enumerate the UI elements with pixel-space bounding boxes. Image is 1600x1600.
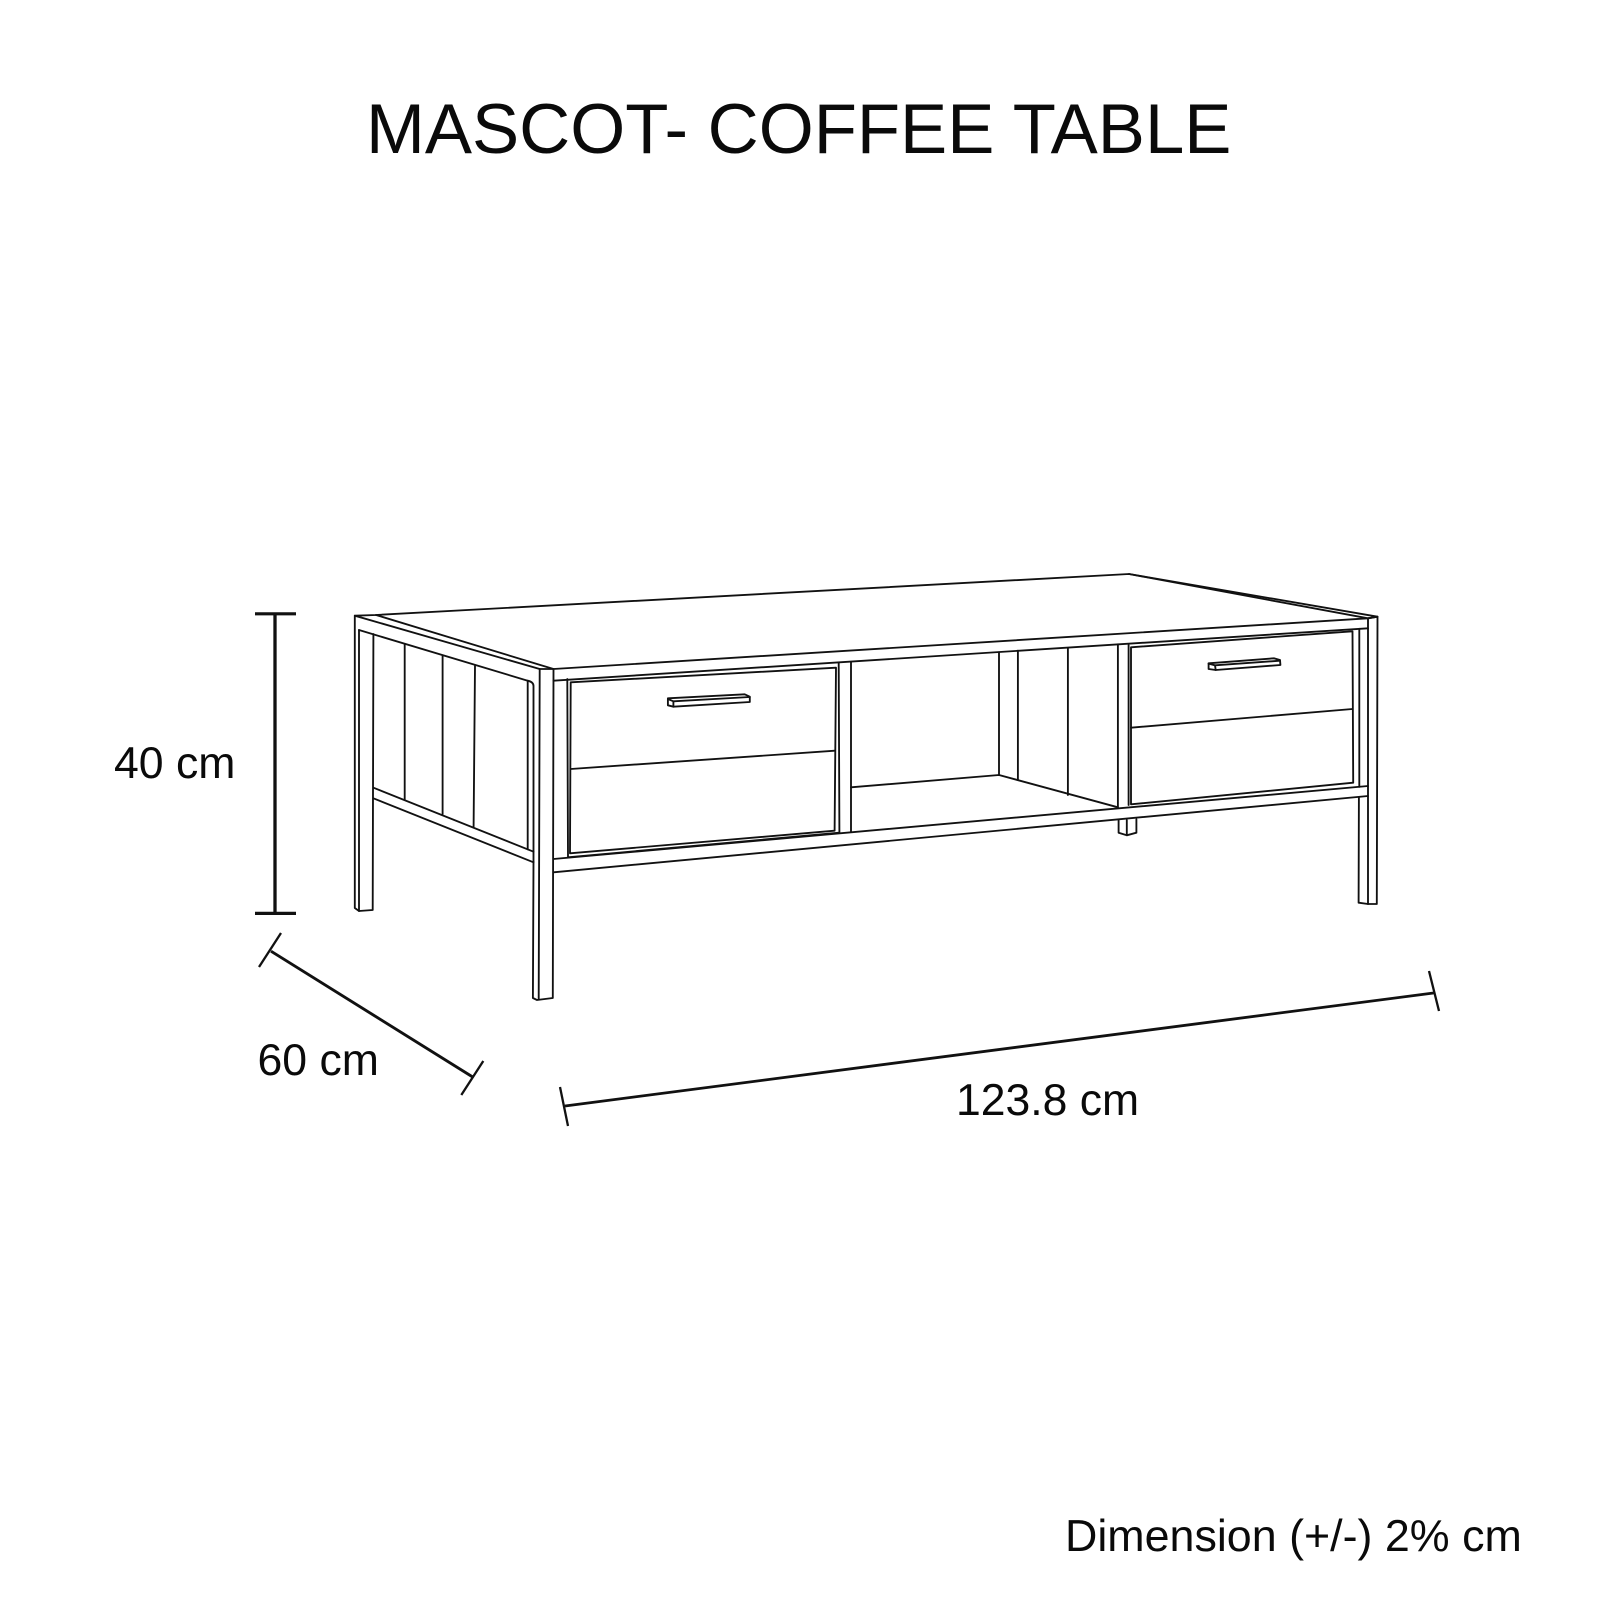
side panel: [359, 630, 534, 862]
coffee table line drawing: [355, 574, 1378, 1000]
front left leg: [533, 669, 554, 1000]
front lower rail: [554, 786, 1368, 872]
front right leg: [1359, 617, 1378, 904]
right drawer handle: [1209, 658, 1280, 670]
height label: 40 cm: [114, 739, 235, 788]
left drawer handle: [668, 694, 750, 707]
title: MASCOT- COFFEE TABLE: [366, 89, 1231, 168]
depth label: 60 cm: [258, 1036, 379, 1085]
right drawer: [1129, 631, 1353, 805]
front upper rail: [554, 628, 1368, 681]
left drawer: [567, 663, 839, 857]
back left leg: [355, 616, 373, 911]
tolerance note: Dimension (+/-) 2% cm: [1065, 1511, 1522, 1561]
height dimension line: [255, 614, 296, 913]
table top: [355, 574, 1378, 669]
back right leg stub: [1119, 819, 1136, 835]
centre open shelf: [851, 644, 1118, 832]
width dimension line: [560, 971, 1439, 1126]
width label: 123.8 cm: [956, 1076, 1139, 1125]
depth dimension line: [259, 933, 483, 1095]
